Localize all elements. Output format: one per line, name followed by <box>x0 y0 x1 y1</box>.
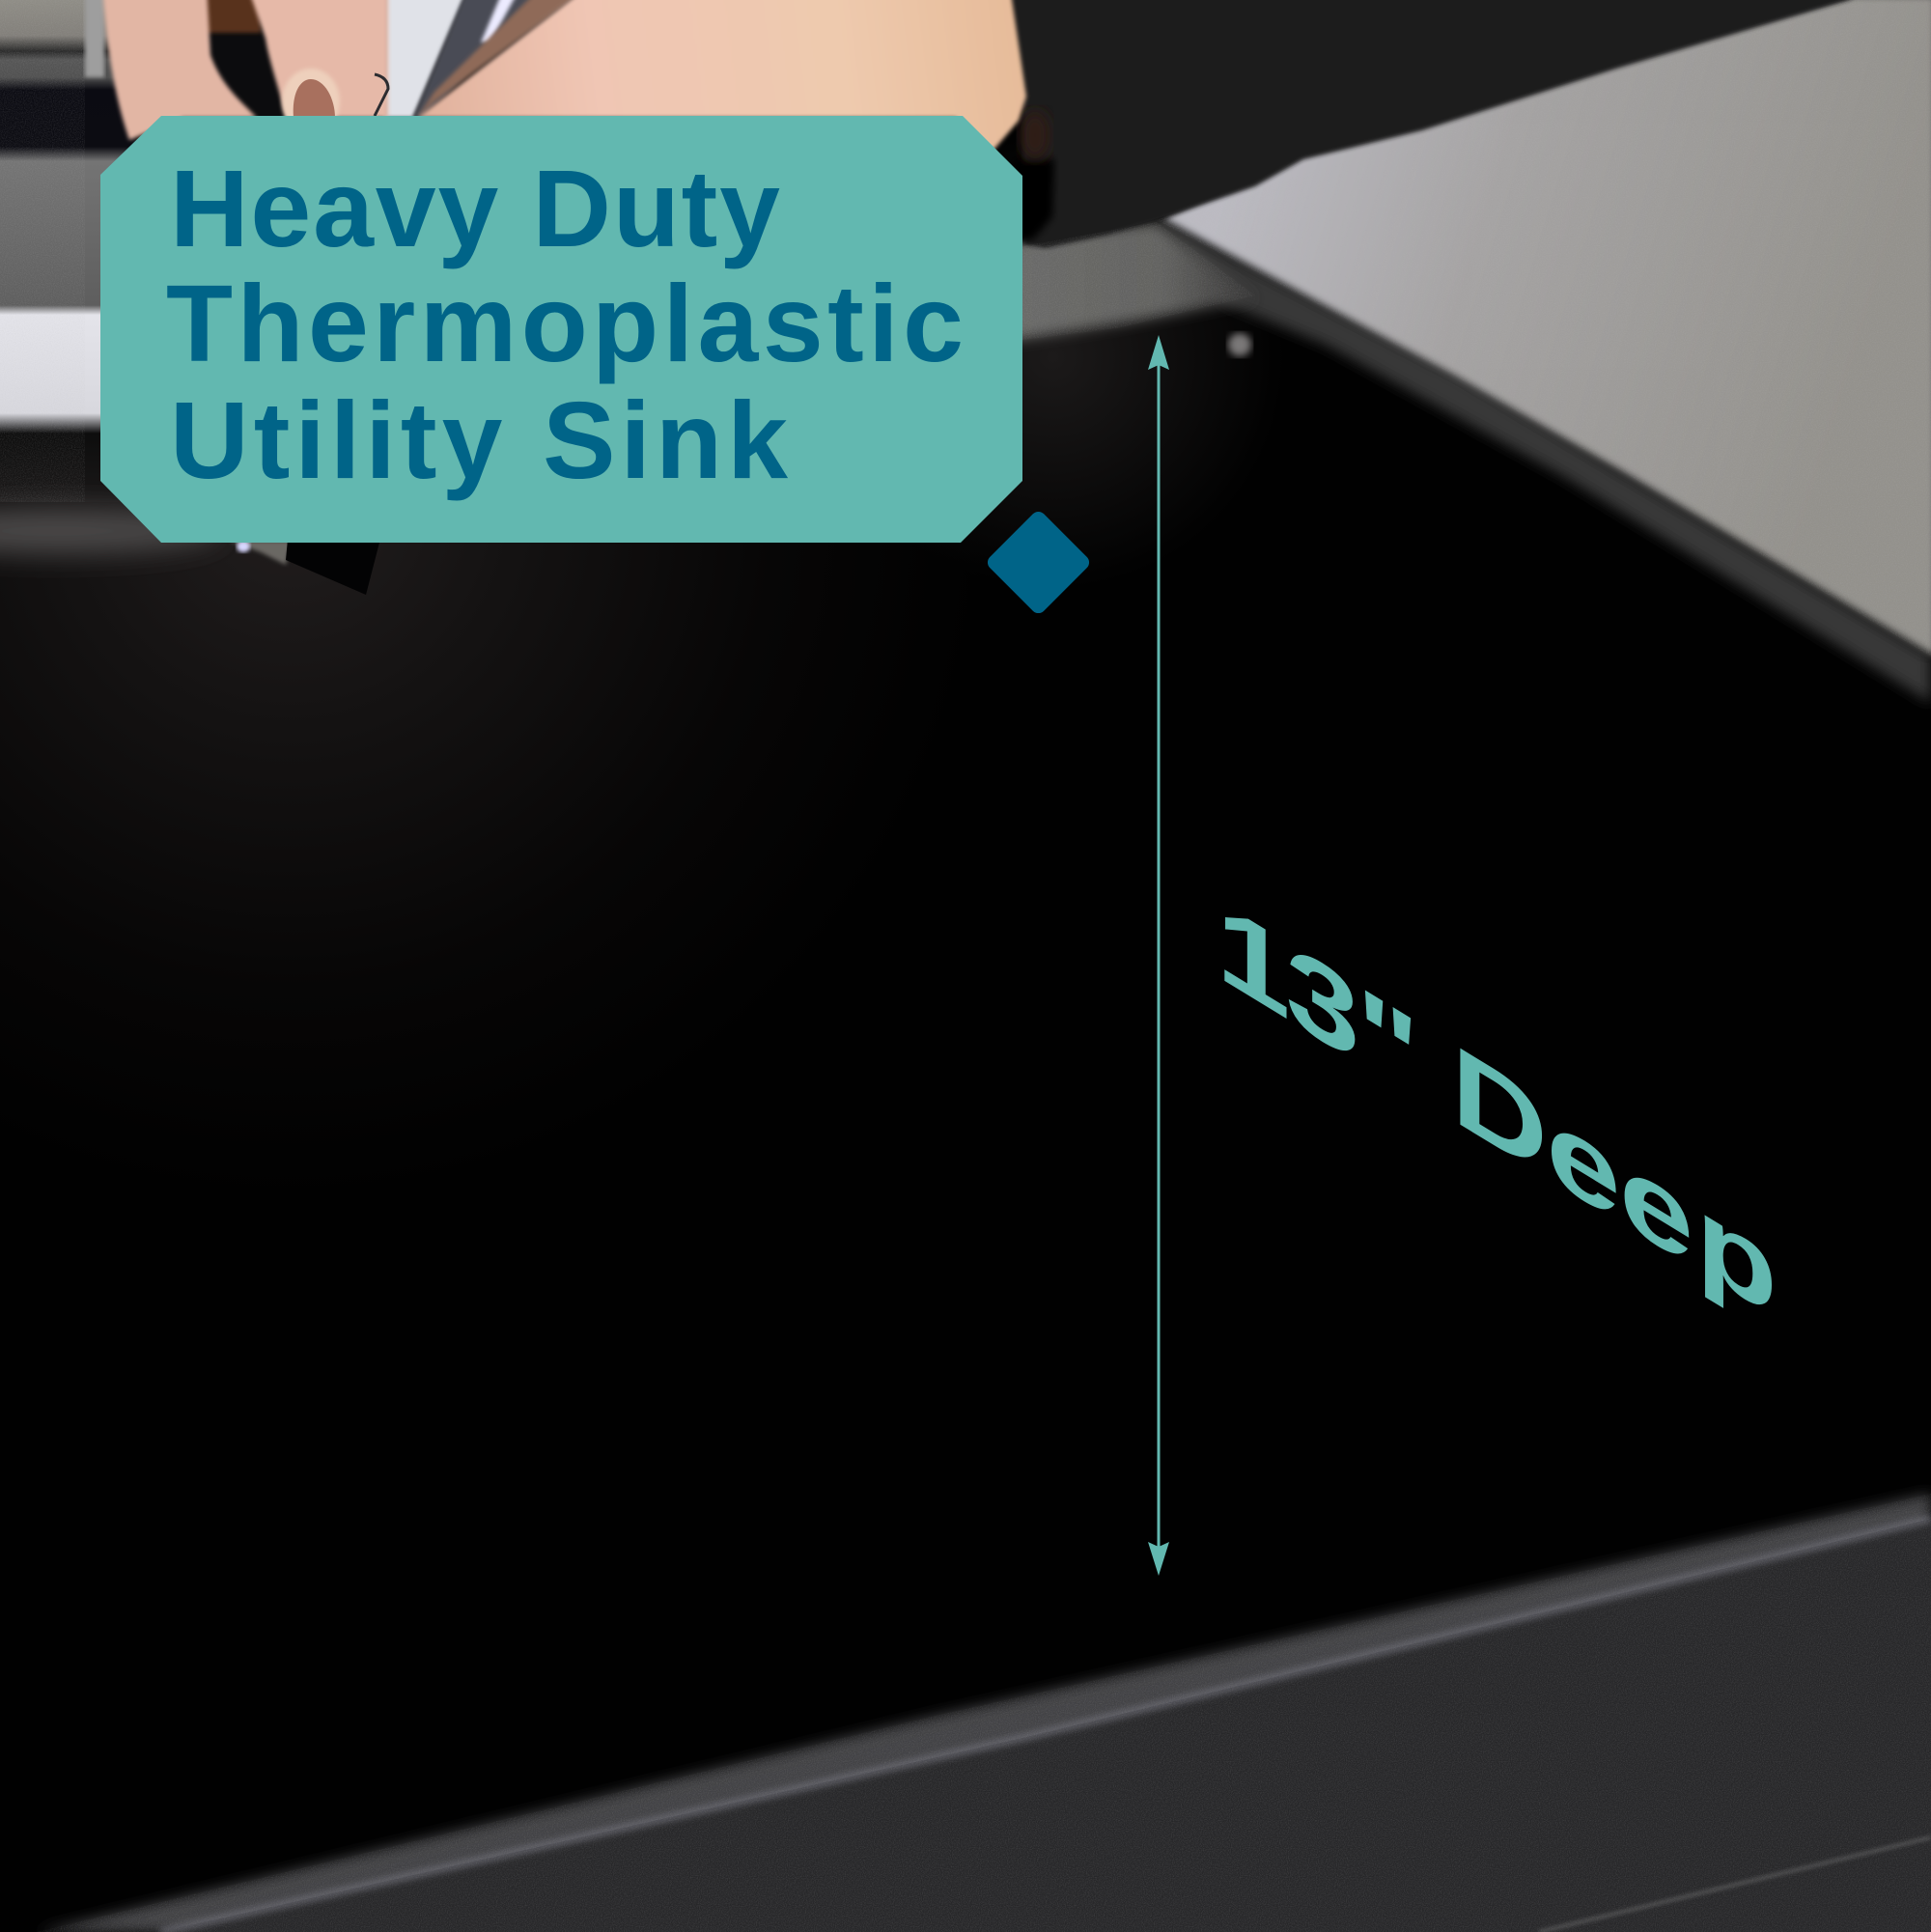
middle finger <box>247 0 388 118</box>
left finger <box>102 0 257 140</box>
lit band on left basin edge <box>0 508 222 554</box>
arrow: depth dimension <box>1148 335 1169 1576</box>
depth label: 13" Deep <box>1217 875 1777 1342</box>
sleeve <box>1009 0 1873 248</box>
title text: Thermoplastic <box>166 263 964 384</box>
chrome highlight <box>481 0 521 42</box>
lower right seam <box>1539 1837 1931 1932</box>
front rim strip <box>37 1494 1931 1932</box>
black gap between fingers <box>203 29 290 121</box>
panel background <box>100 116 1022 543</box>
metal clip <box>375 74 388 116</box>
title text: Heavy Duty <box>170 148 780 269</box>
chrome faucet light part <box>384 0 470 118</box>
wrist shadow <box>1020 110 1050 160</box>
brown gap top <box>203 0 261 33</box>
brown shadow by thumb <box>417 0 591 118</box>
back of hand <box>417 0 1026 154</box>
counter behind sink <box>1004 222 1255 342</box>
back wall <box>1163 0 1931 657</box>
title text: Utility Sink <box>170 379 788 501</box>
chrome faucet dark part <box>413 0 546 118</box>
basin corner glint <box>1228 333 1251 356</box>
icon: diamond marker <box>985 509 1092 616</box>
cuff shadow <box>1014 159 1054 241</box>
front rim highlight <box>160 1519 1931 1932</box>
panel: title callout <box>100 116 1022 543</box>
fingernail <box>294 79 335 118</box>
faucet post <box>85 0 104 77</box>
nail halo <box>282 69 340 134</box>
back rim <box>1157 218 1931 703</box>
sprayer glint <box>237 541 250 552</box>
sprayer lit patch <box>229 541 292 565</box>
title text <box>166 148 964 501</box>
basin shadow glow under faucet <box>0 0 1062 1255</box>
sprayer head under panel <box>286 539 380 595</box>
left faucet and background bands <box>0 0 135 502</box>
basin glow right of panel <box>821 126 1284 589</box>
front face <box>160 1519 1931 1932</box>
